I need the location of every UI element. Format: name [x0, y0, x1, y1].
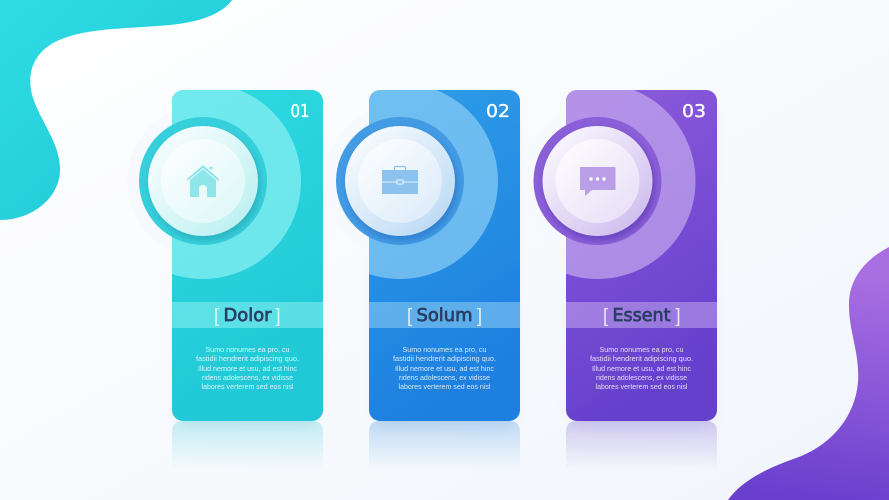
card 2 halo: [324, 105, 476, 257]
card 3 body text: ridens adolescens, ex vidisse: [596, 373, 687, 382]
card 2 arc: [369, 90, 498, 279]
card 3 title: Essent: [612, 306, 671, 326]
card 2 shadow: [375, 100, 514, 424]
card 2 title: Solum: [416, 306, 472, 326]
card 2 body text: Illud nemore et usu, ad est hinc: [395, 364, 494, 373]
card 2 body text: fastidii hendrerit adipiscing quo.: [393, 354, 496, 363]
card 2 reflection: [369, 421, 520, 470]
card 3 title: [: [603, 306, 609, 327]
card 1 title: [214, 306, 281, 327]
card 3 body text: Sumo nonumes ea pro, cu: [600, 345, 684, 354]
card 2 title: ]: [477, 306, 482, 327]
card 1 body text: ridens adolescens, ex vidisse: [202, 373, 293, 382]
icon: speech bubble: [580, 167, 616, 196]
card 3 title band: [566, 302, 717, 328]
card 1 body text: Illud nemore et usu, ad est hinc: [198, 364, 297, 373]
card 3 shadow: [572, 100, 711, 424]
card 3 body text: [590, 345, 693, 391]
card 3 body text: Illud nemore et usu, ad est hinc: [592, 364, 691, 373]
card 1 shadow: [178, 100, 317, 424]
card 2 body text: ridens adolescens, ex vidisse: [399, 373, 490, 382]
card 1 body text: [196, 345, 299, 391]
card 3 body: [566, 90, 717, 421]
card 1 halo: [127, 105, 279, 257]
card 3 halo: [522, 105, 674, 257]
card 1 arc: [172, 90, 301, 279]
card 1 reflection: [172, 421, 323, 470]
card 1 title: Dolor: [224, 306, 272, 326]
card 1 title: ]: [275, 306, 281, 327]
card 2 number: 02: [486, 101, 510, 122]
card 3 body text: fastidii hendrerit adipiscing quo.: [590, 354, 693, 363]
card 1 body text: Sumo nonumes ea pro, cu: [206, 345, 290, 354]
card 1 body text: fastidii hendrerit adipiscing quo.: [196, 354, 299, 363]
panel: card 2 Solum: [336, 90, 520, 462]
card 2 body text: Sumo nonumes ea pro, cu: [402, 345, 486, 354]
card 2 medallion: [336, 117, 464, 245]
panel: card 1 Dolor: [139, 90, 323, 462]
blob: top left: [0, 0, 232, 220]
card 1 body: [172, 90, 323, 421]
card 2 body text: [393, 345, 496, 391]
icon: house: [187, 165, 219, 197]
card 2 body: [369, 90, 520, 421]
card 1 title band: [172, 302, 323, 328]
card 1 number: 01: [290, 101, 310, 122]
card 2 title band: [369, 302, 520, 328]
blob: bottom right: [728, 247, 889, 500]
panel: card 3 Essent: [534, 90, 717, 462]
card 3 arc: [566, 90, 696, 279]
card 3 reflection: [566, 421, 717, 470]
card 1 body text: labores verterem sed eos nisl: [202, 382, 294, 391]
card 3 medallion: [534, 117, 662, 245]
card 3 title: ]: [675, 306, 681, 327]
card 2 body text: labores verterem sed eos nisl: [398, 382, 491, 391]
card 3 body text: labores verterem sed eos nisl: [596, 382, 688, 391]
card 3 number: 03: [682, 101, 706, 122]
icon: briefcase: [382, 166, 418, 194]
card 1 title: [: [214, 306, 220, 327]
card 2 title: [: [407, 306, 413, 327]
card 1 medallion: [139, 117, 267, 245]
card 2 title: [407, 306, 482, 327]
